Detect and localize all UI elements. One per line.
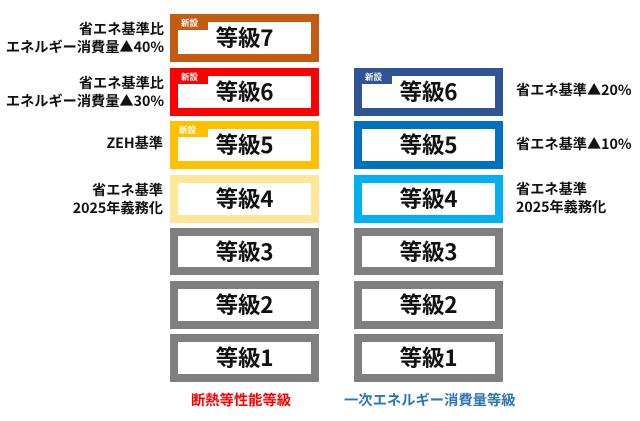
label: grade 4 insulation: [73, 180, 163, 218]
grade box: primary energy 4: 等級4: [400, 182, 457, 214]
grade box: insulation 6: 等級6: [216, 75, 273, 107]
new tag: 新設: [181, 17, 198, 29]
label: grade 7 insulation: 省エネ基準比: [79, 19, 164, 39]
grade box: insulation 2: [170, 281, 319, 329]
label: grade 6 insulation: [6, 73, 164, 111]
grade box: insulation 3: [170, 228, 319, 275]
heading: primary energy grades: 一次エネルギー消費量等級: [344, 389, 516, 410]
new tag: 新設: [179, 124, 196, 136]
label: grade 6 insulation: 省エネ基準比: [79, 73, 164, 93]
label: grade 4 primary energy: 省エネ基準: [516, 179, 587, 199]
grade box: primary energy 1: [354, 334, 503, 382]
grade box: insulation 7: 等級7: [216, 21, 273, 53]
grade box: primary energy 4: [354, 175, 503, 223]
grade box: insulation 3: 等級3: [216, 235, 273, 267]
grade box: insulation 5: 等級5: [216, 128, 273, 160]
label: grade 5 insulation: ZEH基準: [106, 133, 163, 153]
grade box: insulation 4: 等級4: [216, 182, 273, 214]
grade box: primary energy 1: 等級1: [400, 341, 457, 373]
new tag: [170, 14, 208, 30]
grade box: insulation 1: 等級1: [216, 341, 273, 373]
grade box: insulation 1: [170, 334, 319, 382]
grade box: primary energy 3: 等級3: [400, 235, 457, 267]
grade box: insulation 2: 等級2: [216, 288, 273, 320]
grade box: insulation 6: [170, 68, 319, 116]
label: grade 4 insulation: 省エネ基準: [92, 180, 163, 200]
new tag: 新設: [181, 71, 198, 83]
grade box: primary energy 2: 等級2: [400, 288, 457, 320]
label: grade 6 insulation: エネルギー消費量▲30%: [6, 91, 164, 111]
label: grade 7 insulation: [6, 19, 164, 57]
grade box: primary energy 2: [354, 281, 503, 329]
new tag: [354, 68, 392, 84]
label: grade 4 insulation: 2025年義務化: [73, 198, 163, 218]
label: grade 7 insulation: エネルギー消費量▲40%: [6, 37, 164, 57]
new tag: [170, 121, 208, 137]
grade box: primary energy 6: 等級6: [400, 75, 457, 107]
grade box: insulation 5: [170, 121, 319, 169]
grade box: primary energy 5: 等級5: [400, 128, 457, 160]
grade box: insulation 7: [170, 14, 319, 62]
new tag: [170, 68, 208, 84]
grade box: primary energy 3: [354, 228, 503, 275]
new tag: 新設: [365, 71, 382, 83]
grade box: insulation 4: [170, 175, 319, 223]
grade box: primary energy 5: [354, 121, 503, 169]
heading: insulation grades: 断熱等性能等級: [191, 389, 291, 410]
label: grade 4 primary energy: [516, 179, 606, 217]
label: grade 6 primary energy: 省エネ基準▲20%: [516, 80, 632, 100]
label: grade 5 primary energy: 省エネ基準▲10%: [516, 134, 632, 154]
grade box: primary energy 6: [354, 68, 503, 116]
label: grade 4 primary energy: 2025年義務化: [516, 197, 606, 217]
